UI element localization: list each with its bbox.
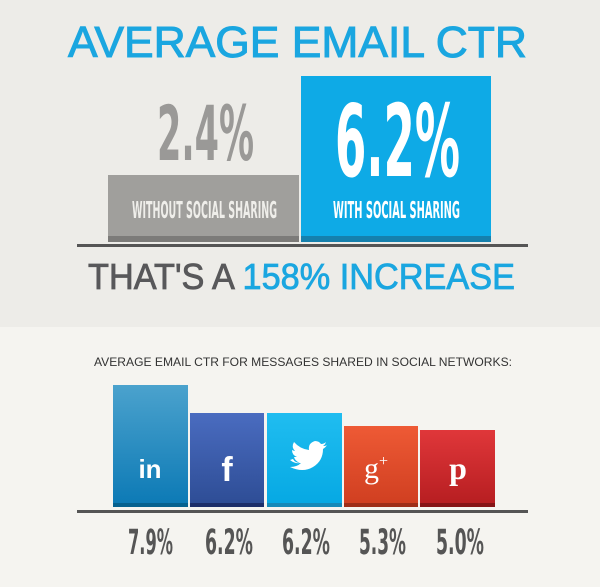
- bar: without social sharing: WITHOUT SOCIAL SHARING: [132, 198, 277, 224]
- bar: with social sharing: WITH SOCIAL SHARING: [333, 198, 460, 224]
- value 6.2%: 6.2%: [335, 83, 460, 200]
- icon: google plus: g: [364, 452, 379, 485]
- bar: facebook: [190, 413, 264, 507]
- bar: google plus: [344, 426, 418, 507]
- value labels: 5.0%: [436, 523, 484, 563]
- bar: pinterest: [420, 430, 495, 507]
- title: AVERAGE EMAIL CTR: [68, 18, 527, 67]
- value labels: 7.9%: [128, 523, 173, 563]
- increase headline: THAT'S A 158% INCREASE: [88, 256, 515, 297]
- icon: facebook: f: [221, 451, 233, 489]
- bar chart: social networks: [113, 385, 495, 507]
- bar: with social sharing: [301, 76, 491, 242]
- icon: linkedin: in: [138, 454, 162, 484]
- value labels: [128, 523, 484, 563]
- bar: without social sharing: [108, 89, 299, 242]
- value 2.4%: 2.4%: [157, 89, 254, 178]
- value labels: 5.3%: [359, 523, 406, 563]
- bar: linkedin: [113, 385, 188, 507]
- icon: pinterest: p: [449, 450, 467, 486]
- value labels: 6.2%: [282, 523, 330, 563]
- subtitle: AVERAGE EMAIL CTR FOR MESSAGES SHARED IN SOCIAL NETWORKS:: [94, 355, 512, 369]
- value labels: 6.2%: [205, 523, 253, 563]
- bar: twitter: [267, 413, 342, 507]
- icon: google plus: +: [379, 453, 388, 470]
- icon: twitter bird: [290, 441, 327, 470]
